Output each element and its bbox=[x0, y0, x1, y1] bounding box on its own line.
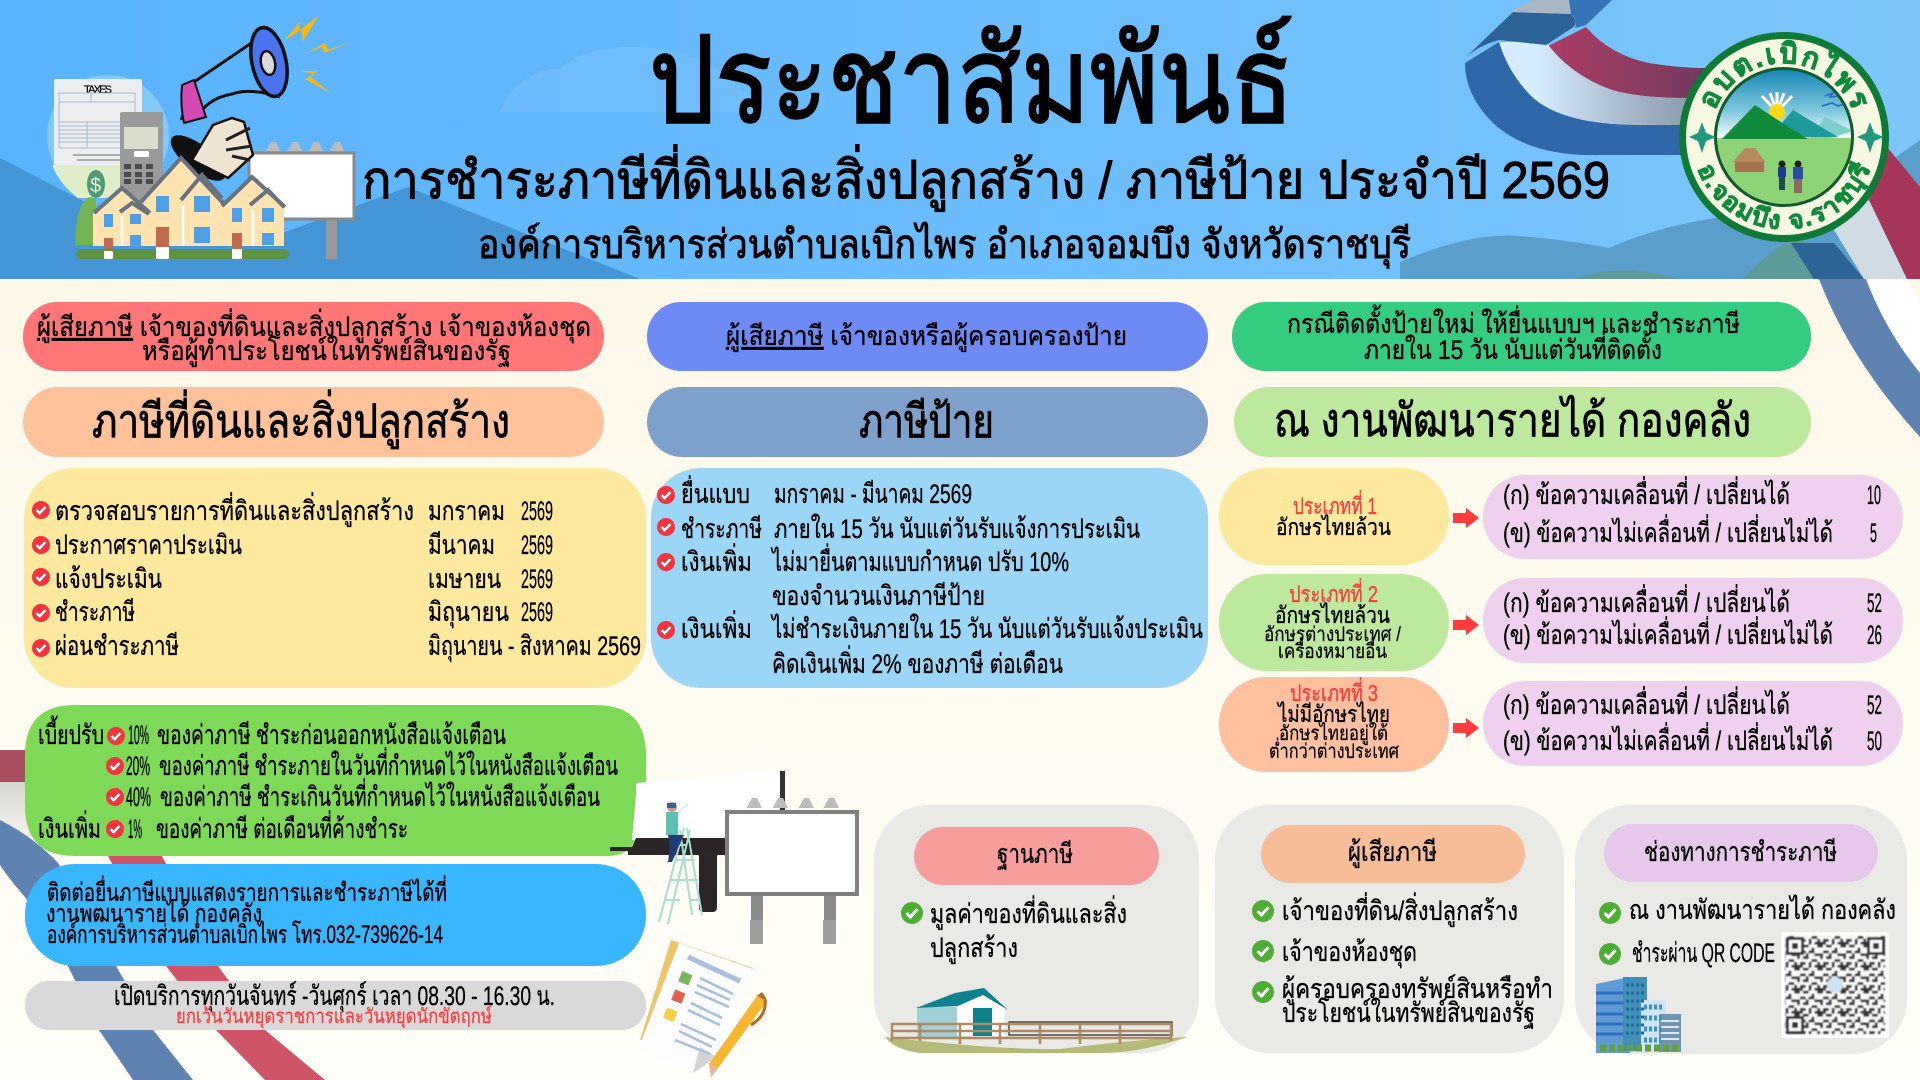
rates 2 bbox=[1483, 578, 1903, 663]
panel: penalties: ของค่าภาษี ชำระเกินวันที่กำหนดไว้ในหนังสือแจ้งเตือน bbox=[160, 778, 600, 812]
billboard bbox=[249, 142, 354, 259]
hand bbox=[192, 118, 253, 178]
panel: land tax schedule: 2569 bbox=[521, 530, 553, 560]
panel: sign tax schedule: มกราคม - มีนาคม 2569 bbox=[774, 479, 972, 509]
clouds bbox=[500, 47, 760, 112]
panel: land tax schedule: ชำระภาษี bbox=[55, 597, 135, 627]
card: tax base bbox=[874, 805, 1199, 1053]
rates 1 bbox=[1483, 475, 1903, 559]
rates 3: (ก) ข้อความเคลื่อนที่ / เปลี่ยนได้ bbox=[1503, 686, 1790, 720]
type 3 bbox=[1219, 677, 1449, 772]
arrow 2 bbox=[1453, 615, 1479, 635]
subtitle: การชำระภาษีที่ดินและสิ่งปลูกสร้าง / ภาษีป้าย ประจำปี 2569 bbox=[362, 144, 1610, 212]
header banner bbox=[0, 0, 1920, 279]
pale circle bbox=[47, 75, 169, 197]
column 2 bbox=[647, 302, 1208, 688]
card: tax base: ปลูกสร้าง bbox=[930, 933, 1018, 964]
panel: penalties: เงินเพิ่ม bbox=[38, 810, 101, 844]
heading: land tax: ภาษีที่ดินและสิ่งปลูกสร้าง bbox=[92, 389, 510, 449]
panel: land tax schedule: ประกาศราคาประเมิน bbox=[55, 530, 242, 560]
type 3: ไม่มีอักษรไทย bbox=[1276, 701, 1390, 727]
type 3: ต่ำกว่าต่างประเทศ bbox=[1269, 737, 1399, 763]
panel: sign tax schedule: ชำระภาษี bbox=[681, 514, 762, 544]
rates 3: 50 bbox=[1867, 726, 1882, 756]
panel: penalties: 10% bbox=[128, 720, 149, 750]
illustration: document and pencil bbox=[638, 940, 767, 1078]
type 2: อักษรต่างประเทศ / bbox=[1264, 624, 1401, 646]
calculator bbox=[120, 112, 163, 202]
heading: sign tax: ภาษีป้าย bbox=[859, 395, 994, 447]
arrow 3 bbox=[1453, 718, 1479, 738]
panel: service hours: เปิดบริการทุกวันจันทร์ -วันศุกร์ เวลา 08.30 - 16.30 น. bbox=[114, 980, 555, 1013]
ribbon: right side below header bbox=[1819, 279, 1920, 437]
qr code bbox=[1781, 932, 1889, 1038]
ribbon: bottom left flag bbox=[0, 750, 325, 1080]
panel: penalties: 20% bbox=[126, 751, 150, 781]
panel: land tax schedule: ตรวจสอบรายการที่ดินและสิ่งปลูกสร้าง bbox=[55, 492, 414, 527]
panel: contact: ติดต่อยื่นภาษีแบบแสดงรายการและชำระภาษีได้ที่ bbox=[47, 875, 447, 907]
panel: land tax schedule: มกราคม bbox=[428, 496, 505, 526]
panel: sign tax schedule: ของจำนวนเงินภาษีป้าย bbox=[772, 581, 985, 611]
seal bbox=[1679, 32, 1889, 242]
panel: contact: องค์การบริหารส่วนตำบลเบิกไพร โทร.032-739626-14 bbox=[47, 920, 443, 949]
type 2 bbox=[1219, 574, 1449, 671]
type 1 bbox=[1219, 468, 1449, 565]
panel: land tax schedule bbox=[24, 468, 646, 688]
type 3: ประเภทที่ 3 bbox=[1290, 677, 1378, 706]
panel: land tax schedule: 2569 bbox=[521, 496, 553, 526]
pill: taxpayers: ผู้เสียภาษี bbox=[1348, 837, 1437, 868]
heading: revenue office: ณ งานพัฒนารายได้ กองคลัง bbox=[1274, 394, 1751, 446]
panel: contact bbox=[25, 864, 646, 966]
rates 1: (ก) ข้อความเคลื่อนที่ / เปลี่ยนได้ bbox=[1503, 476, 1790, 510]
rates 2: (ก) ข้อความเคลื่อนที่ / เปลี่ยนได้ bbox=[1503, 584, 1790, 618]
panel: land tax schedule: เมษายน bbox=[428, 564, 501, 594]
houses bbox=[75, 158, 289, 259]
pill: taxpayer land bbox=[23, 302, 604, 371]
panel: sign tax schedule: ยื่นแบบ bbox=[681, 475, 750, 509]
panel: penalties: 1% bbox=[128, 814, 142, 844]
seal: อบต.เบิกไพร bbox=[1702, 40, 1868, 109]
card: taxpayers: ประโยชน์ในทรัพย์สินของรัฐ bbox=[1282, 997, 1535, 1029]
panel: penalties: 40% bbox=[126, 782, 151, 812]
buildings bbox=[1596, 977, 1681, 1053]
pill: payment channels: ช่องทางการชำระภาษี bbox=[1644, 837, 1837, 867]
panel: land tax schedule: ผ่อนชำระภาษี bbox=[55, 631, 179, 661]
pill: new sign notice: กรณีติดตั้งป้ายใหม่ ให้ยื่นแบบฯ และชำระภาษี bbox=[1287, 304, 1740, 339]
dollar badge: $ bbox=[90, 175, 101, 197]
panel: land tax schedule: 2569 bbox=[521, 597, 553, 627]
card: taxpayers: เจ้าของที่ดิน/สิ่งปลูกสร้าง bbox=[1282, 892, 1518, 927]
pill: new sign notice: ภายใน 15 วัน นับแต่วันที่ติดตั้ง bbox=[1364, 330, 1662, 365]
mountains left bbox=[0, 158, 640, 279]
type 3: อักษรไทยอยู่ใต้ bbox=[1279, 722, 1388, 746]
panel: sign tax schedule: เงินเพิ่ม bbox=[681, 543, 752, 577]
panel: sign tax schedule: ไม่มายื่นตามแบบกำหนด ปรับ 10% bbox=[771, 543, 1069, 577]
rates 3 bbox=[1483, 681, 1903, 766]
column 3 bbox=[1219, 302, 1903, 772]
panel: service hours: ยกเว้นวันหยุดราชการและวันหยุดนักขัตฤกษ์ bbox=[176, 1005, 492, 1029]
pill: taxpayer land: ผู้เสียภาษี เจ้าของที่ดินและสิ่งปลูกสร้าง เจ้าของห้องชุด bbox=[37, 308, 591, 344]
pill: payment channels bbox=[1604, 824, 1878, 882]
pill: taxpayer land: หรือผู้ทำประโยชน์ในทรัพย์สินของรัฐ bbox=[142, 335, 511, 367]
panel: penalties bbox=[25, 705, 646, 856]
column 1 bbox=[23, 302, 646, 1030]
ladder bbox=[659, 828, 702, 924]
type 2: อักษรไทยล้วน bbox=[1275, 602, 1390, 628]
panel: sign tax schedule: คิดเงินเพิ่ม 2% ของภาษี ต่อเดือน bbox=[772, 645, 1063, 679]
organization line: องค์การบริหารส่วนตำบลเบิกไพร อำเภอจอมบึง จังหวัดราชบุรี bbox=[478, 222, 1411, 269]
title: ประชาสัมพันธ์ bbox=[649, 14, 1294, 148]
panel: land tax schedule: มีนาคม bbox=[428, 530, 495, 560]
rates 1: 5 bbox=[1870, 518, 1877, 548]
dollar badge bbox=[87, 170, 105, 198]
panel: sign tax schedule: ไม่ชำระเงินภายใน 15 วัน นับแต่วันรับแจ้งประเมิน bbox=[771, 613, 1203, 644]
pill: taxpayers bbox=[1261, 825, 1525, 883]
panel: land tax schedule: 2569 bbox=[521, 564, 553, 594]
ribbon: upper flag bbox=[1465, 0, 1920, 279]
megaphone bbox=[181, 24, 293, 123]
worker bbox=[666, 802, 688, 862]
panel: contact: งานพฒนารายได้ กองคลัง bbox=[46, 899, 262, 928]
pill: taxpayer signs bbox=[647, 302, 1208, 371]
tax document: TAXES bbox=[84, 84, 112, 96]
panel: penalties: ของค่าภาษี ชำระก่อนออกหนังสือแจ้งเตือน bbox=[157, 720, 506, 750]
panel: land tax schedule: มิถุนายน bbox=[428, 597, 509, 629]
rates 1: 10 bbox=[1867, 480, 1881, 510]
page background bbox=[0, 279, 1920, 1080]
bolts bbox=[284, 15, 350, 93]
arrow 1 bbox=[1453, 508, 1479, 528]
panel: sign tax schedule: เงินเพิ่ม bbox=[681, 610, 752, 644]
type 2: ประเภทที่ 2 bbox=[1289, 578, 1378, 607]
type 2: เครื่องหมายอื่น bbox=[1278, 637, 1387, 663]
panel: penalties: ของค่าภาษี ชำระภายในวันที่กำหนดไว้ในหนังสือแจ้งเตือน bbox=[159, 747, 618, 781]
illustration: farm house bbox=[885, 988, 1187, 1053]
heading: land tax bbox=[23, 387, 604, 457]
card: payment channels: ชำระผ่าน QR CODE bbox=[1632, 938, 1775, 968]
card: taxpayers bbox=[1215, 805, 1564, 1053]
card: tax base: มูลค่าของที่ดินและสิ่ง bbox=[930, 895, 1127, 930]
card: payment channels bbox=[1575, 805, 1907, 1054]
pill: taxpayer signs: ผู้เสียภาษี เจ้าของหรือผู้ครอบครองป้าย bbox=[726, 321, 1127, 352]
panel: sign tax schedule: ภายใน 15 วัน นับแต่วันรับแจ้งการประเมิน bbox=[774, 513, 1140, 544]
mountains right bbox=[1400, 140, 1920, 279]
pill: tax base bbox=[914, 827, 1159, 885]
panel: land tax schedule: แจ้งประเมิน bbox=[55, 564, 162, 594]
type 1: อักษรไทยล้วน bbox=[1276, 514, 1391, 540]
pill: new sign notice bbox=[1232, 302, 1811, 371]
money bbox=[52, 165, 122, 198]
panel: land tax schedule: มิถุนายน - สิงหาคม 2569 bbox=[428, 631, 641, 663]
heading: sign tax bbox=[647, 387, 1208, 457]
sleeve bbox=[164, 127, 232, 189]
illustration: taxes, megaphone, houses and billboard bbox=[47, 15, 354, 259]
illustration: billboard installer bbox=[610, 769, 857, 944]
type 1: ประเภทที่ 1 bbox=[1293, 490, 1377, 519]
heading: revenue office bbox=[1234, 387, 1811, 457]
pill: tax base: ฐานภาษี bbox=[997, 839, 1073, 870]
card: taxpayers: เจ้าของห้องชุด bbox=[1282, 937, 1417, 969]
rates 3: 52 bbox=[1867, 690, 1882, 720]
card: taxpayers: ผู้ครอบครองทรัพย์สินหรือทำ bbox=[1282, 973, 1553, 1005]
rates 2: 26 bbox=[1867, 620, 1882, 650]
panel: penalties: ของค่าภาษี ต่อเดือนที่ค้างชำระ bbox=[156, 810, 408, 844]
seal: อ.จอมบึง จ.ราชบุรี bbox=[1697, 160, 1870, 230]
panel: sign tax schedule bbox=[651, 468, 1208, 688]
panel: service hours bbox=[25, 980, 646, 1030]
panel: penalties: เบี้ยปรับ bbox=[38, 715, 104, 750]
rates 2: 52 bbox=[1867, 588, 1882, 618]
tax document bbox=[54, 79, 142, 165]
